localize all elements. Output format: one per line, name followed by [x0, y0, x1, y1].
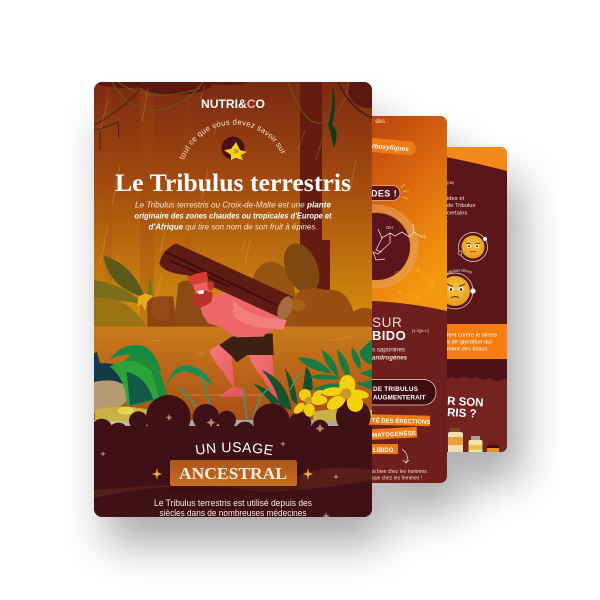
- sparkle stars: [100, 414, 339, 520]
- intro fragment: : des :: [372, 119, 389, 125]
- description: [134, 200, 332, 232]
- man carrying a log: [159, 243, 296, 397]
- hanging vines: [94, 82, 372, 150]
- libido heading: BIDO: [372, 328, 406, 343]
- big green plant: [110, 345, 213, 407]
- orange callout band: s de glycation qui: [447, 340, 492, 346]
- libido heading: [1,2][A-C]: [412, 328, 429, 333]
- olive ground patch: [95, 407, 150, 422]
- faint network dots: [395, 268, 434, 300]
- orange callout band: ment des tissus.: [447, 346, 489, 352]
- olive ground patch right: [313, 409, 373, 422]
- ground highlights: [150, 337, 353, 395]
- icon: angry free radical face: [447, 268, 476, 310]
- plant on the left: [93, 255, 153, 327]
- saponines text: androgènes: [372, 354, 408, 362]
- dark statement pill: AUGMENTERAIT: [373, 394, 426, 402]
- hand and arm: [233, 300, 287, 330]
- orange tag: libido: LIBIDO: [373, 448, 394, 454]
- curved subtitle: tout ce que vous devez savoir sur: [180, 118, 286, 160]
- description: d'Afrique qui tire son nom de son fruit à épines.: [148, 222, 318, 232]
- icon: calm molecule face: [458, 232, 488, 262]
- hanging leaves: [328, 84, 337, 148]
- rain streaks: [100, 85, 356, 297]
- dark body of back card: [447, 157, 507, 324]
- heading: un usage: UN USAGE: [196, 442, 273, 456]
- foreground scene in zoomed coordinates: [90, 238, 377, 422]
- forest sky background: [94, 82, 372, 332]
- intro text fragment: certains: [447, 210, 467, 216]
- dark stripe below callout: [447, 359, 507, 381]
- closing note: [372, 469, 427, 482]
- dark scalloped lower panel: [90, 395, 380, 533]
- question heading: RIS ?: [447, 407, 477, 421]
- golden sparkles beside banner: [152, 468, 313, 480]
- closing note: si bien chez les hommes: [372, 469, 427, 475]
- logo: NUTRI&CO: [201, 99, 265, 111]
- orange tag: libido: [372, 444, 398, 454]
- closing note: que chez les femmes !: [372, 476, 422, 482]
- shorts: [219, 333, 274, 362]
- intro text fragment: de Tribulus: [447, 203, 475, 209]
- lower panel of middle card: [368, 300, 447, 483]
- closing text: [154, 498, 313, 518]
- rear leg: [248, 347, 281, 397]
- beige rock: [90, 380, 130, 413]
- head with hair and beard: [187, 272, 214, 307]
- orange pill: [372, 138, 416, 156]
- orange tag: spermatogenese: [372, 426, 418, 440]
- ancestral banner: ANCESTRAL: [179, 464, 287, 483]
- description: originaire des zones chaudes ou tropicales d'Europe et: [134, 210, 332, 220]
- panel: back card: [447, 147, 507, 452]
- torso: [201, 289, 280, 337]
- swoosh in lower panel: [94, 468, 372, 498]
- panel: front card: [94, 82, 372, 517]
- lower panel of back card: [447, 376, 507, 452]
- canopy: [97, 82, 372, 108]
- log: [159, 243, 293, 320]
- libido heading: SUR: [372, 315, 402, 330]
- arrow: [402, 449, 409, 463]
- saponines text: s saponines: [372, 346, 405, 354]
- question heading: [448, 396, 483, 418]
- right fern leaves: [297, 340, 373, 390]
- question heading: R SON: [447, 396, 484, 409]
- icon: flower emblem: [222, 136, 247, 160]
- orange pill: rboxyliques: [372, 143, 409, 153]
- ground: [90, 327, 377, 420]
- dark statement pill: DE TRIBULUS: [373, 386, 419, 393]
- orange tag: erections: [368, 414, 430, 426]
- rocks behind the man: [147, 238, 373, 327]
- product bottles: [448, 428, 499, 454]
- panel: middle card: [368, 116, 447, 483]
- icon: angry free radical face: Radicaux libres: [447, 268, 472, 274]
- intro text fragment: .: [447, 218, 449, 224]
- dark exclamation pill: [372, 184, 409, 201]
- saponines text: [372, 346, 408, 362]
- card shadow: [106, 116, 521, 544]
- front leg: [209, 344, 244, 397]
- intro text fragment: (08): [447, 180, 455, 185]
- molecule circle: [372, 204, 426, 288]
- ancestral banner: [170, 460, 298, 488]
- closing text: siècles dans de nombreuses médecines: [160, 508, 307, 518]
- molecule circle: OH: [386, 225, 393, 230]
- intro text fragment: ides et: [447, 196, 464, 202]
- closing text: Le Tribulus terrestris est utilisé depuis des: [154, 498, 313, 508]
- icon: small yellow flower: [137, 293, 153, 311]
- orange tag: erections: TÉ DES ÉRECTIONS: [372, 416, 430, 426]
- background tree trunks: [105, 82, 330, 332]
- molecule circle: 26: [421, 234, 427, 239]
- infographic stack of three cards: [79, 82, 548, 571]
- dark pointed plant: [253, 367, 313, 410]
- main title: Le Tribulus terrestris: [115, 170, 351, 197]
- intro text fragment: [447, 180, 475, 224]
- icon: second yellow flower: [292, 389, 327, 417]
- orange tag: spermatogenese: MATOGENÈSE: [372, 429, 416, 439]
- dark exclamation pill: DES !: [371, 188, 397, 198]
- dark teal rock: [90, 352, 127, 390]
- description: Le Tribulus terrestris ou Croix-de-Malte est une plante: [135, 200, 331, 210]
- orange callout band: [447, 324, 507, 359]
- libido heading: [372, 318, 429, 340]
- icon: big yellow flower: [322, 375, 370, 415]
- dark statement pill: [372, 379, 436, 406]
- orange callout band: ient contre le stress: [447, 332, 497, 338]
